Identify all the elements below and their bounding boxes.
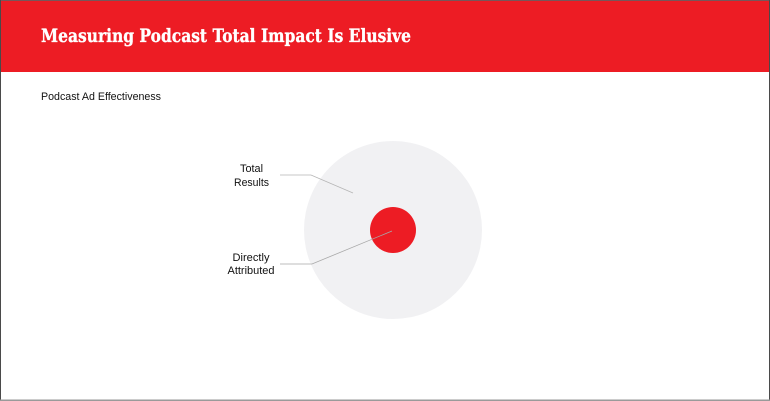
circle: directly attributed [370, 207, 416, 253]
subtitle: Podcast Ad Effectiveness [41, 91, 161, 103]
diagram: nested circles [304, 141, 482, 319]
label: directly attributed [228, 231, 392, 277]
title: Measuring Podcast Total Impact Is Elusive [41, 26, 411, 47]
label: total results: Total [240, 163, 263, 175]
label: total results [234, 163, 353, 193]
label: directly attributed: Directly [232, 252, 270, 264]
header banner [0, 0, 770, 72]
label: total results: Results [234, 177, 269, 189]
circle: total results [304, 141, 482, 319]
label: directly attributed: Attributed [228, 265, 274, 277]
